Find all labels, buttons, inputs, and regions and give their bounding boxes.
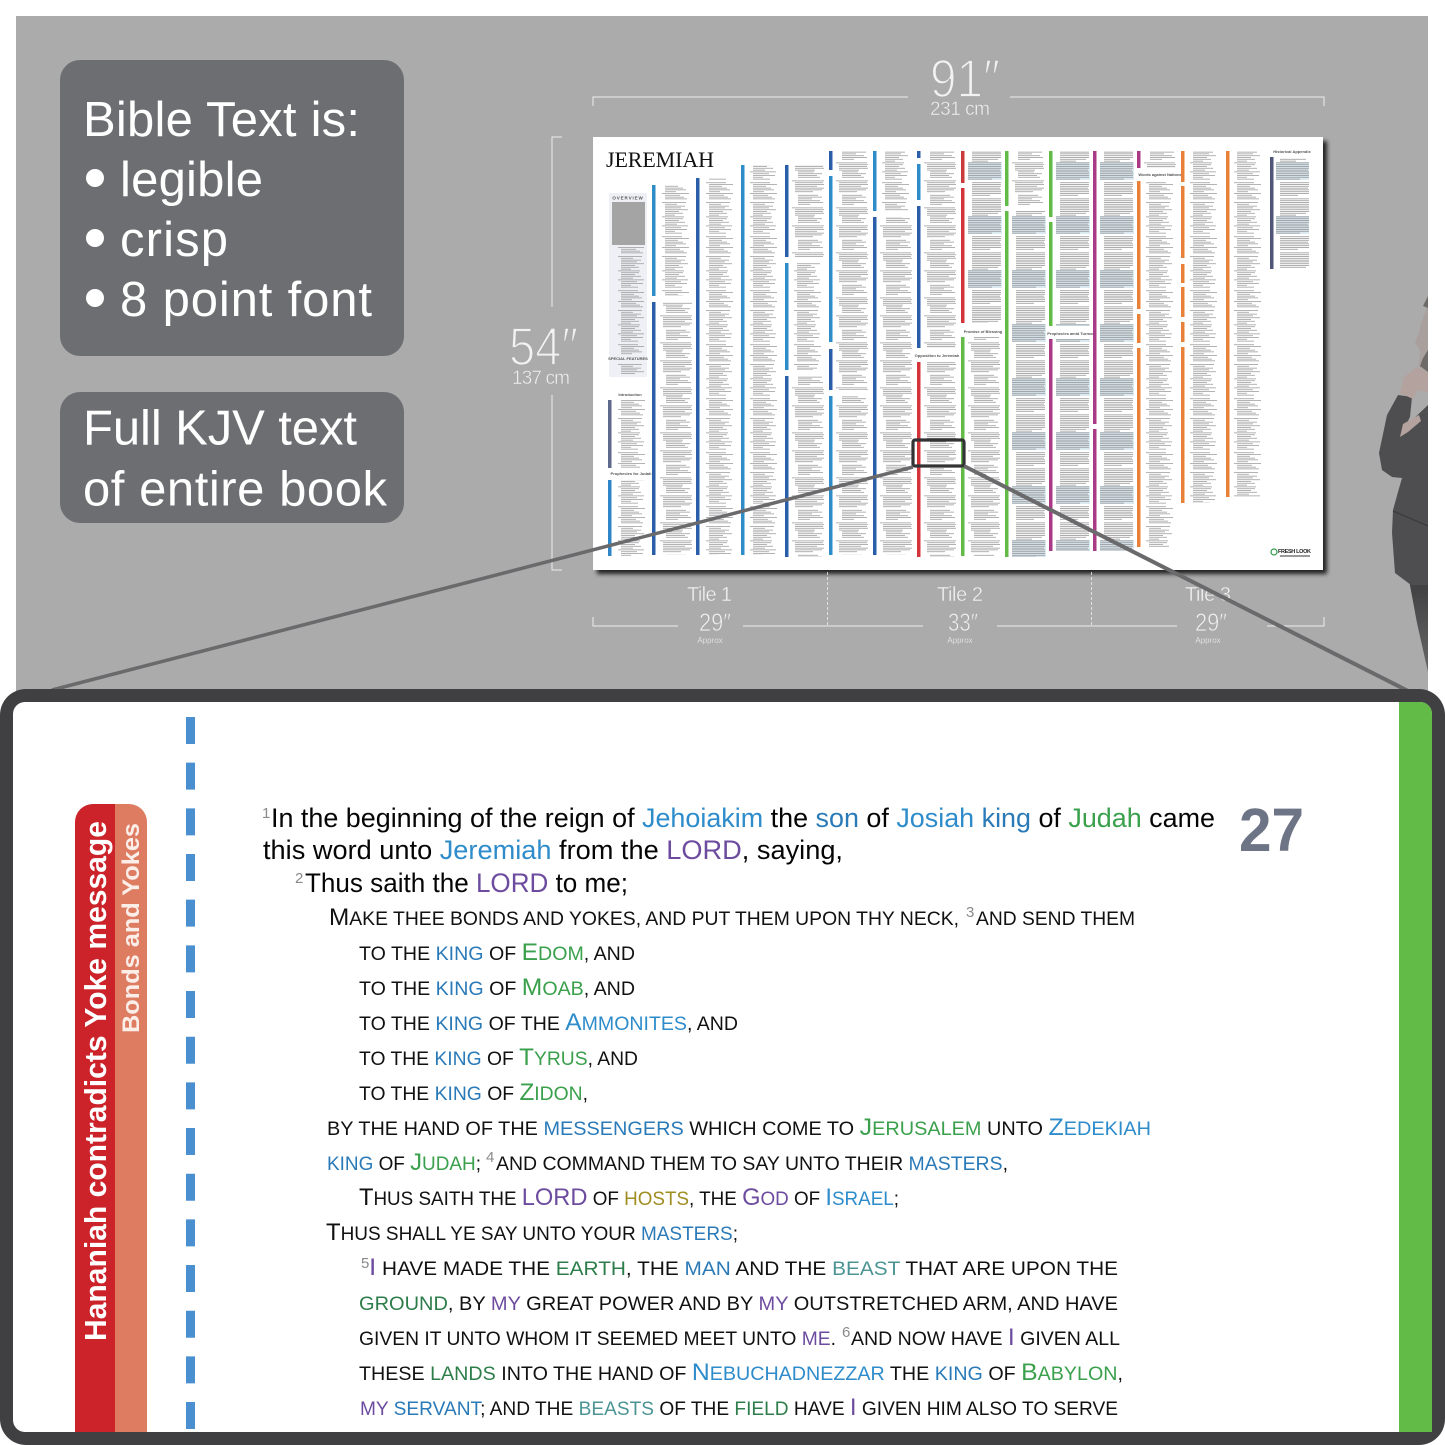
scripture text block: I HAVE MADE THE EARTH, THE MAN AND THE BEAST THAT ARE UPON THE (369, 1254, 1118, 1281)
poster overview block: OVERVIEW (612, 196, 644, 200)
scripture text block: AND COMMAND THEM TO SAY UNTO THEIR MASTERS, (496, 1153, 1008, 1175)
poster section label: Prophecies for Judah: Prophecies for Judah (611, 471, 652, 476)
bullet: 8 point font: 8 point font (120, 273, 372, 327)
bullet: legible: legible (120, 153, 263, 207)
poster overview block: SPECIAL FEATURES (608, 356, 648, 361)
poster: Jeremiah chart (593, 137, 1323, 570)
person: face (1415, 305, 1428, 372)
zoom connector line: right (964, 466, 1410, 692)
tile 3: 29″ (1195, 609, 1227, 637)
scripture text block: 2 (295, 870, 303, 887)
person: trousers (1410, 584, 1428, 672)
info box: Bible text is (60, 60, 404, 356)
scripture text block: 6 (842, 1324, 850, 1341)
sidebar: salmon section label: Bonds and Yokes (118, 823, 145, 1033)
poster section label: Promise of Blessing: Promise of Blessing (964, 329, 1003, 334)
poster column 11 (1049, 151, 1090, 551)
scripture text block: THUS SHALL YE SAY UNTO YOUR MASTERS; (326, 1219, 738, 1246)
green section bar (1399, 702, 1432, 1432)
person: hand on chin (1400, 367, 1428, 399)
dimension: height 54 inches (509, 137, 578, 570)
poster column 4 (741, 165, 782, 555)
info box: Full KJV text (60, 392, 404, 523)
tile 1: Tile 1 (687, 584, 732, 606)
poster logo: Fresh Look (1271, 549, 1311, 557)
tile 1 (687, 584, 732, 645)
scripture text block: TO THE KING OF EDOM, AND (359, 939, 635, 966)
scripture text block: Thus saith the LORD to me; (305, 868, 628, 898)
poster column 12 (1093, 151, 1134, 551)
tile measure lines (593, 572, 1324, 626)
scripture text block: MAKE THEE BONDS AND YOKES, AND PUT THEM UPON THY NECK, (329, 904, 959, 931)
sidebar: red section label: Hananiah contradicts Yoke message (78, 821, 113, 1341)
poster section label: Historical Appendix: Historical Appendix (1273, 149, 1311, 154)
poster section label: Words against Nations: Words against Nations (1138, 172, 1182, 177)
scripture text block: GROUND, BY MY GREAT POWER AND BY MY OUTSTRETCHED ARM, AND HAVE (359, 1293, 1118, 1315)
scripture text block: AND SEND THEM (976, 908, 1135, 930)
poster column 16 (1270, 157, 1309, 269)
zoom connector line: left (52, 467, 913, 690)
poster column 2 (652, 185, 693, 555)
person: lower hand (1400, 415, 1421, 437)
poster column 10 (1005, 151, 1046, 557)
scripture text block: BY THE HAND OF THE MESSENGERS WHICH COME TO JERUSALEM UNTO ZEDEKIAH (327, 1114, 1151, 1141)
tile 1: Approx (697, 636, 723, 645)
magnified panel (0, 689, 1445, 1445)
person: beard and hair (1420, 296, 1428, 372)
scripture text block: TO THE KING OF ZIDON, (359, 1079, 588, 1106)
poster column 14 (1181, 151, 1222, 503)
poster section label: Introduction: Introduction (618, 392, 642, 397)
scripture text block: TO THE KING OF THE AMMONITES, AND (359, 1009, 738, 1036)
poster title: JEREMIAH (606, 147, 714, 172)
person: jacket (1379, 395, 1428, 585)
tile 2: Approx (947, 636, 973, 645)
poster column 9 (961, 151, 1002, 556)
blue dashed divider (186, 717, 195, 1432)
dimension: height 54 inches: 54″ (509, 317, 578, 377)
tile 1: 29″ (699, 609, 731, 637)
scripture text block: KING OF JUDAH; (327, 1149, 481, 1176)
sidebar: salmon section label (115, 804, 147, 1432)
person standing beside the poster (1379, 296, 1428, 672)
scripture text block: 1 (262, 805, 270, 822)
dimension: height 54 inches: 137 cm (512, 368, 570, 389)
tile 2: 33″ (948, 609, 978, 637)
zoom box on the poster (913, 440, 964, 466)
scripture text block: THESE LANDS INTO THE HAND OF NEBUCHADNEZZAR THE KING OF BABYLON, (359, 1359, 1123, 1386)
scripture text block: 4 (486, 1149, 494, 1166)
poster column 5 (785, 165, 826, 557)
dimension: width 91 inches: 91″ (930, 49, 1000, 109)
poster overview block (608, 193, 648, 377)
scripture text block: 3 (966, 904, 974, 921)
tile 3: Approx (1195, 636, 1221, 645)
poster column 15 (1226, 151, 1263, 497)
info box: Full KJV text: Full KJV text (83, 402, 357, 456)
tile 2: Tile 2 (937, 584, 983, 606)
scripture text block: THUS SAITH THE LORD OF HOSTS, THE GOD OF ISRAEL; (359, 1184, 899, 1211)
tile labels and measurements (593, 572, 1324, 645)
poster logo: Fresh Look: FRESH LOOK (1278, 549, 1311, 555)
dimension: width 91 inches: 231 cm (930, 99, 990, 120)
scripture text block: MY SERVANT; AND THE BEASTS OF THE FIELD HAVE I GIVEN HIM ALSO TO SERVE (360, 1394, 1118, 1421)
poster section label: Prophecies amid Turmoil: Prophecies amid Turmoil (1047, 331, 1095, 336)
bullet: crisp: crisp (120, 213, 228, 267)
gray wall background (16, 16, 1428, 696)
tile 2 (937, 584, 983, 645)
scripture text block: 5 (361, 1255, 369, 1272)
scripture text block: GIVEN IT UNTO WHOM IT SEEMED MEET UNTO ME. (359, 1328, 836, 1350)
poster column 8 (917, 151, 958, 557)
scripture text block (262, 803, 1215, 1421)
scripture text block: In the beginning of the reign of Jehoiakim the son of Josiah king of Judah came (271, 803, 1215, 833)
poster column 1 (608, 400, 646, 556)
info box: Full KJV text: of entire book (83, 462, 388, 516)
poster section label: Opposition to Jeremiah: Opposition to Jeremiah (915, 353, 960, 358)
poster column 3 (696, 178, 737, 555)
person: jacket pocket (1393, 511, 1428, 526)
scripture text block: TO THE KING OF TYRUS, AND (359, 1044, 638, 1071)
scripture text block: TO THE KING OF MOAB, AND (359, 974, 635, 1001)
tile 3: Tile 3 (1185, 584, 1231, 606)
scripture text block: this word unto Jeremiah from the LORD, saying, (263, 835, 843, 865)
poster column 13 (1137, 151, 1178, 547)
tile 3 (1185, 584, 1231, 645)
dimension: width 91 inches (593, 49, 1324, 120)
chapter number: 27 (1239, 796, 1304, 864)
heading: Bible Text is: Bible Text is: (83, 93, 360, 147)
poster column 6 (829, 151, 870, 555)
poster column 7 (873, 151, 914, 555)
scripture text block: AND NOW HAVE I GIVEN ALL (851, 1324, 1120, 1351)
